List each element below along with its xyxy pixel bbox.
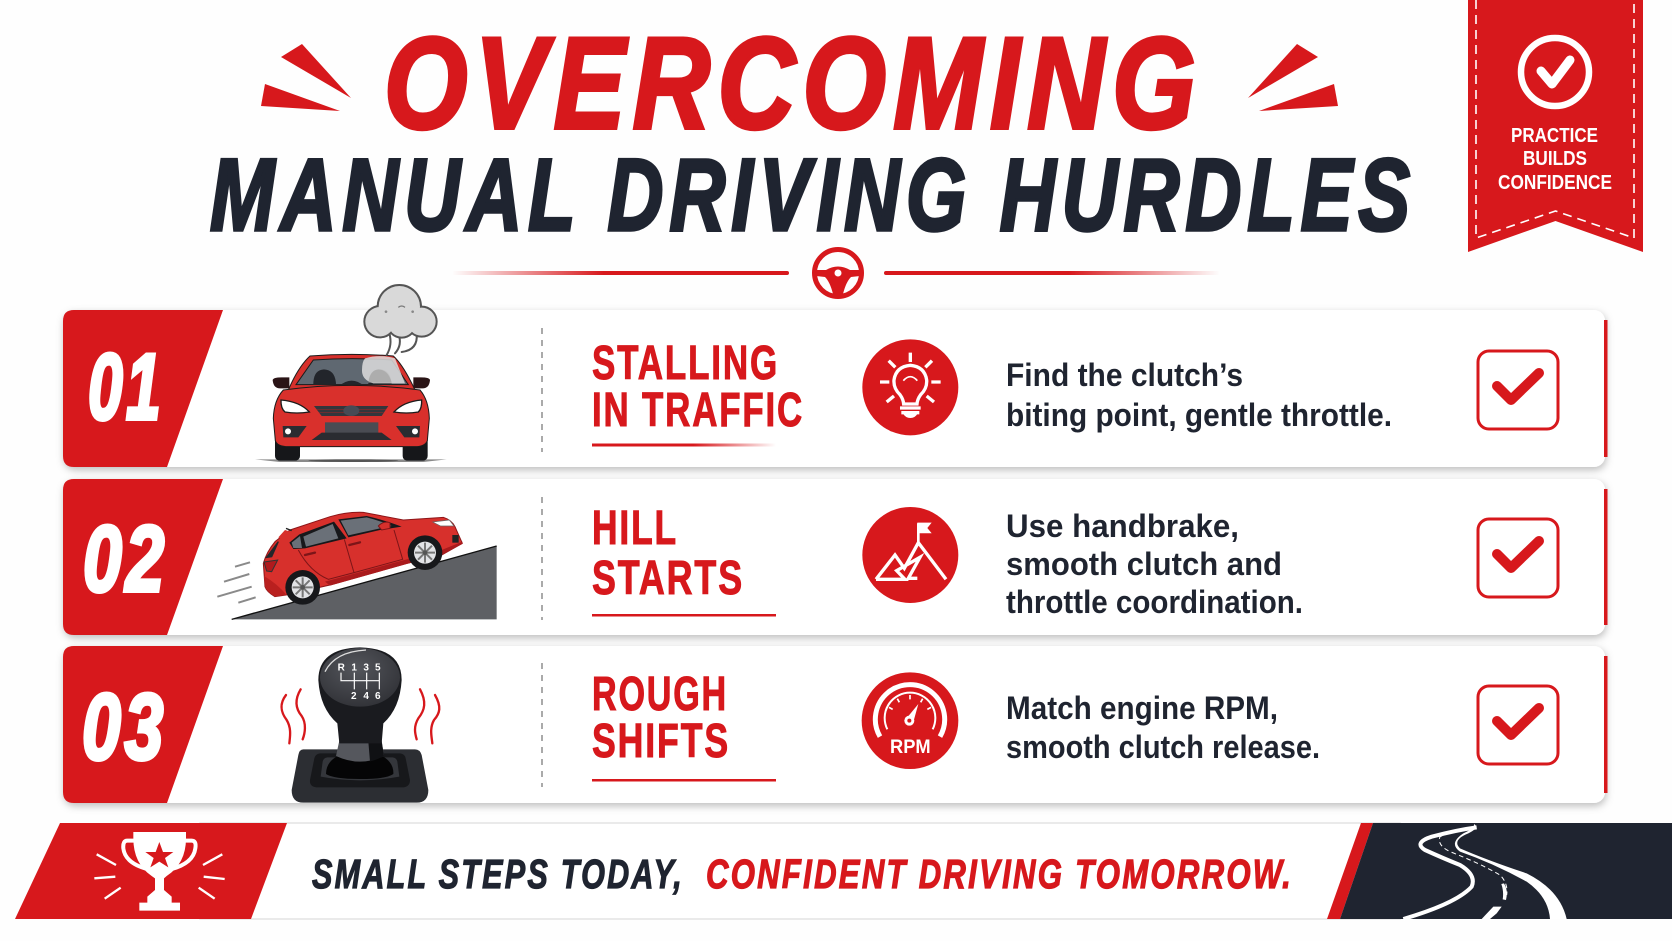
illustration: gear shift knob: 2 <box>351 691 357 702</box>
text: tip 2: throttle coordination. <box>1006 584 1303 620</box>
ribbon text <box>1498 125 1612 194</box>
illustration: gear shift knob: 4 <box>363 691 369 702</box>
text: tip 3 <box>1006 690 1320 765</box>
illustration: gear shift knob: 3 <box>363 663 369 674</box>
burst left <box>261 44 351 111</box>
icon: mountain with flag <box>862 507 958 603</box>
title divider with steering wheel <box>452 250 1220 296</box>
icon: checkbox <box>1478 351 1558 429</box>
icon: winding road <box>1403 824 1567 919</box>
illustration: red car on hill <box>217 512 497 619</box>
slogan text <box>312 851 1293 897</box>
heading: hill starts: HILL <box>592 502 678 555</box>
icon: trophy with rays <box>94 832 225 911</box>
text: tip 1 <box>1006 357 1392 433</box>
heading: stalling in traffic: IN TRAFFIC <box>592 384 804 437</box>
slogan text: SMALL STEPS TODAY, <box>312 851 684 897</box>
icon: check circle <box>1521 38 1589 106</box>
ribbon text: PRACTICE <box>1511 125 1598 147</box>
text: tip 1: biting point, gentle throttle. <box>1006 397 1392 433</box>
icon: checkbox <box>1478 686 1558 764</box>
heading: stalling in traffic <box>592 337 804 437</box>
heading: hill starts <box>592 502 744 605</box>
banner red block <box>15 823 287 919</box>
heading: rough shifts: SHIFTS <box>592 715 730 768</box>
icon: checkbox <box>1478 519 1558 597</box>
heading: rough shifts <box>592 668 730 768</box>
number 02: 02 <box>83 506 168 611</box>
illustration: gear shift knob <box>281 647 439 803</box>
panel: row 2 hill starts <box>63 479 1608 635</box>
icon: light bulb <box>862 339 958 435</box>
text: tip 2 <box>1006 508 1303 620</box>
text: tip 3: smooth clutch release. <box>1006 729 1320 765</box>
icon: rpm gauge: RPM <box>890 737 931 758</box>
banner: bottom slogan <box>15 823 1672 919</box>
title: overcoming: OVERCOMING <box>384 10 1203 156</box>
heading: hill starts: STARTS <box>592 552 744 605</box>
illustration: gear shift knob: R <box>338 663 345 674</box>
text: tip 2: smooth clutch and <box>1006 546 1282 582</box>
panel: row 1 stalling in traffic <box>63 310 1608 467</box>
icon: rpm gauge <box>862 672 958 769</box>
illustration: gear shift knob: 6 <box>375 691 381 702</box>
ribbon text: CONFIDENCE <box>1498 172 1612 194</box>
illustration: stalled red car with smoke <box>255 286 447 462</box>
text: tip 1: Find the clutch’s <box>1006 357 1243 393</box>
heading: rough shifts: ROUGH <box>592 668 728 721</box>
burst right <box>1248 44 1338 111</box>
panel: row 3 rough shifts <box>63 646 1608 803</box>
number 01: 01 <box>88 334 164 439</box>
slogan text: CONFIDENT DRIVING TOMORROW. <box>706 851 1293 897</box>
heading: stalling in traffic: STALLING <box>592 337 779 390</box>
number 03: 03 <box>82 674 167 779</box>
illustration: gear shift knob: 5 <box>375 663 381 674</box>
road panel <box>1327 823 1672 919</box>
icon: steering wheel <box>814 250 862 296</box>
text: tip 2: Use handbrake, <box>1006 508 1239 544</box>
ribbon badge <box>1468 0 1643 252</box>
illustration: gear shift knob: 1 <box>351 663 357 674</box>
ribbon text: BUILDS <box>1523 148 1587 170</box>
text: tip 3: Match engine RPM, <box>1006 690 1278 726</box>
